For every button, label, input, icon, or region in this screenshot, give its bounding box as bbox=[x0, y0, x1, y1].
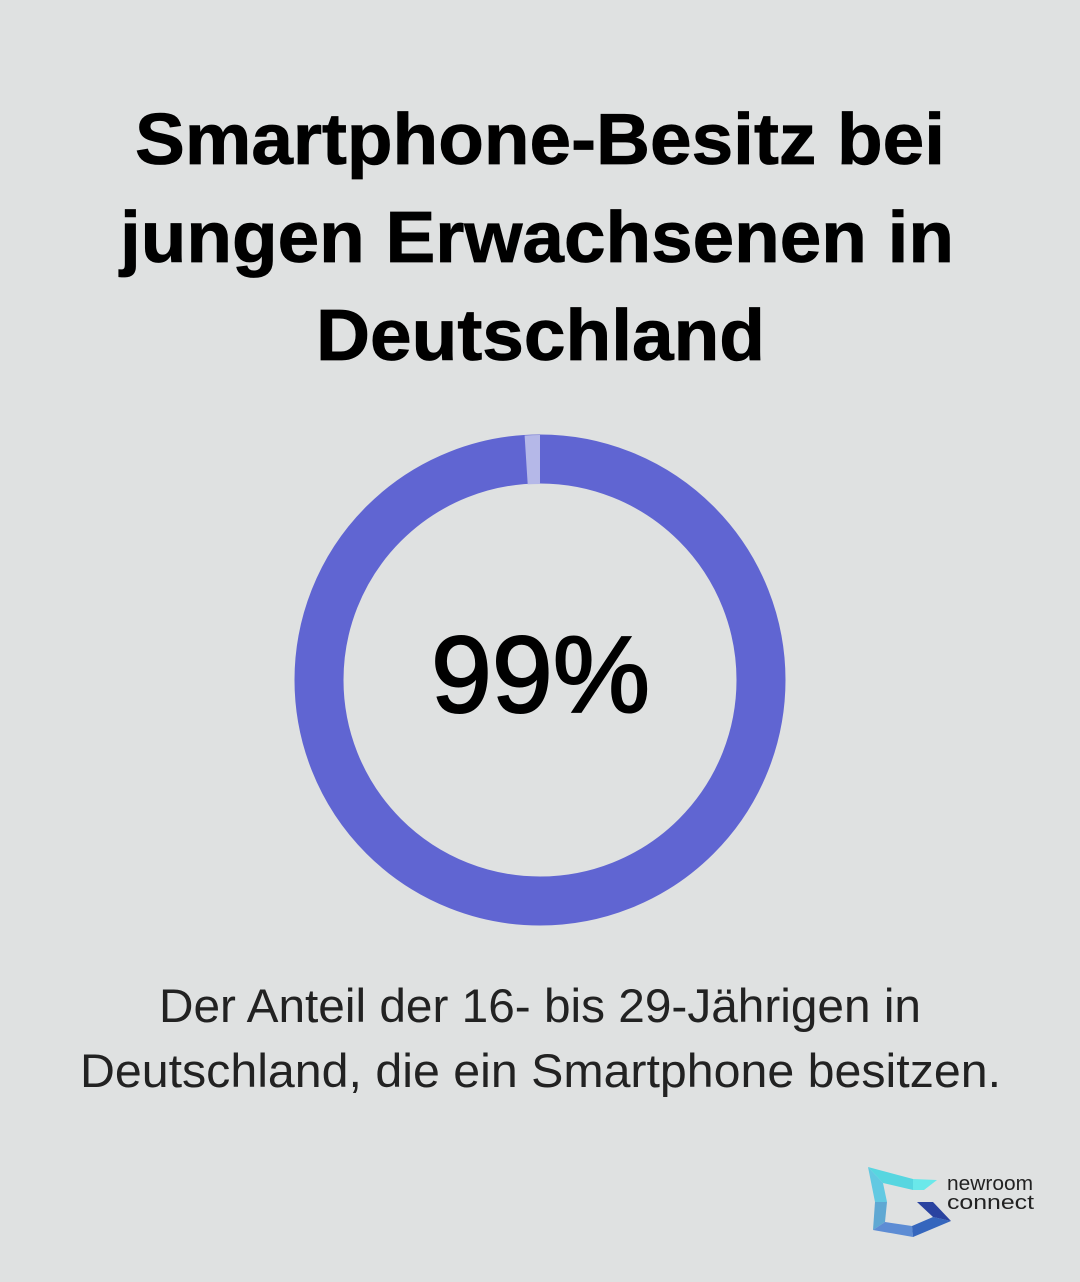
center value: 99% bbox=[431, 614, 650, 736]
logo wordmark bbox=[947, 1173, 1035, 1214]
logo wordmark: connect bbox=[947, 1192, 1035, 1214]
title: jungen Erwachsenen in bbox=[118, 198, 954, 278]
title: Smartphone-Besitz bei bbox=[135, 100, 945, 180]
title bbox=[118, 100, 954, 376]
caption: Deutschland, die ein Smartphone besitzen. bbox=[80, 1044, 1001, 1097]
caption bbox=[80, 979, 1001, 1097]
caption: Der Anteil der 16- bis 29-Jährigen in bbox=[159, 979, 921, 1032]
logo: newroom connect bbox=[868, 1167, 1035, 1237]
logo wordmark: newroom bbox=[947, 1173, 1033, 1195]
icon: logo mark bbox=[868, 1167, 951, 1237]
remaining segment: 1 percent bbox=[525, 435, 540, 484]
donut chart: 99 percent bbox=[319, 435, 761, 901]
title: Deutschland bbox=[316, 296, 765, 376]
